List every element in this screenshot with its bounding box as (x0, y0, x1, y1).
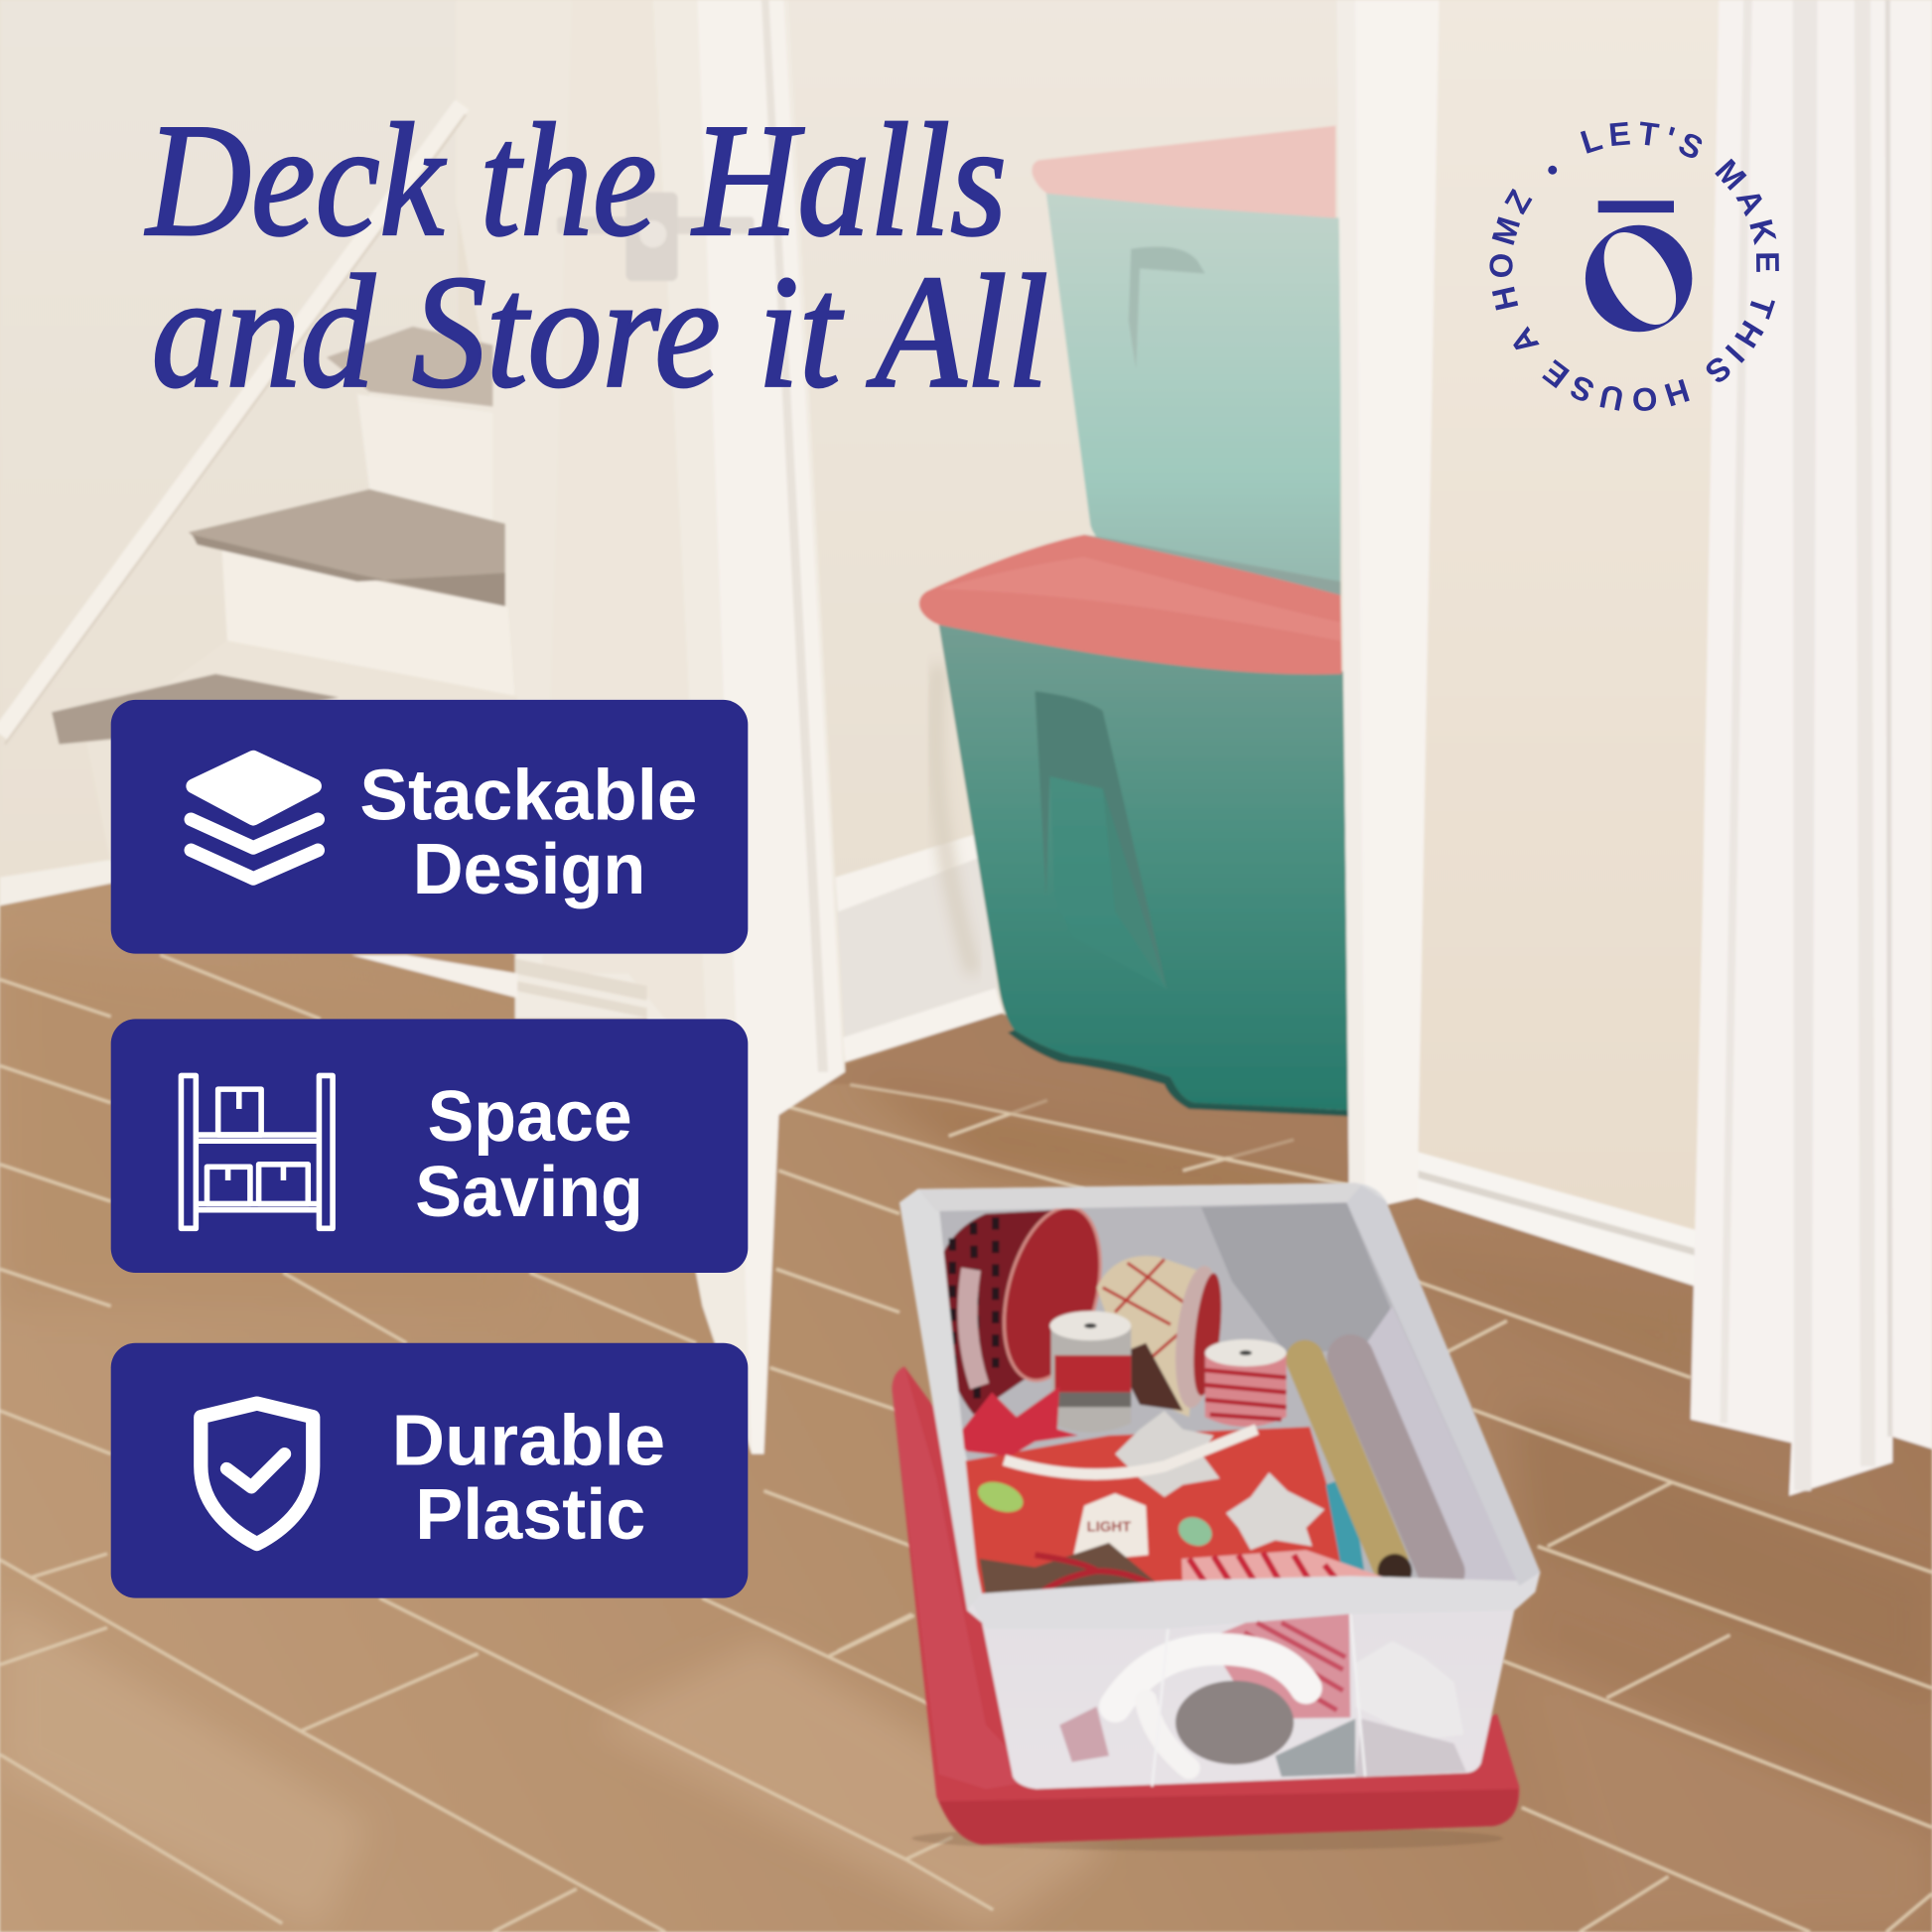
interior back wall (936, 1200, 1519, 1594)
title: and Store it All (152, 242, 1048, 421)
door and frame (351, 0, 845, 1453)
label: durable plastic (392, 1402, 665, 1555)
door handle (557, 193, 755, 281)
panel: stackable design (111, 700, 748, 954)
gift tag (1072, 1493, 1149, 1563)
cream plaid ribbon (1097, 1256, 1201, 1417)
icon: shelf with boxes (181, 1075, 333, 1228)
title (145, 91, 1048, 421)
wrapping paper (956, 1427, 1350, 1594)
silver bows (1115, 1411, 1220, 1497)
scalloped trim (1004, 1430, 1257, 1474)
twine spool (1205, 1353, 1287, 1427)
right door frame (1337, 0, 1445, 1213)
label: durable plastic: Durable (392, 1402, 665, 1481)
icon: stacked layers (191, 758, 318, 879)
back wall (776, 0, 1355, 1115)
front rim (967, 1573, 1540, 1629)
red bow (955, 1386, 1078, 1456)
left wall (0, 0, 459, 881)
gold roll (1305, 1359, 1390, 1563)
clear storage tub with red lid and wrapping supplies (893, 1182, 1540, 1851)
handrail (0, 104, 462, 735)
right door folds (1691, 0, 1932, 1496)
skirting left (0, 859, 117, 905)
label: stackable design (359, 756, 697, 909)
stair wall (369, 0, 579, 955)
panel: space saving (111, 1019, 748, 1273)
tile floor (0, 850, 1932, 1932)
right baseboard (1417, 1152, 1699, 1288)
front contents seen through tub (1207, 1614, 1350, 1719)
left rim (899, 1189, 980, 1610)
label: space saving: Saving (415, 1153, 643, 1232)
gray roll (1350, 1358, 1442, 1573)
right wall (1418, 0, 1723, 1238)
red lid (893, 1366, 1519, 1845)
baseboard behind bins (835, 833, 1001, 1062)
silver spool (1051, 1325, 1131, 1433)
burlap (980, 1543, 1169, 1601)
clear storage tub with red lid and wrapping supplies: LIGHT (1087, 1520, 1131, 1536)
plaid ribbon (934, 1210, 1084, 1415)
label: space saving: Space (428, 1077, 632, 1157)
striped paper (1181, 1550, 1401, 1596)
label: stackable design: Stackable (359, 756, 697, 835)
label: durable plastic: Plastic (415, 1475, 645, 1555)
tub body (899, 1182, 1540, 1789)
icon: shield with check (201, 1404, 313, 1544)
logo mark (1586, 201, 1692, 337)
logo badge (1489, 121, 1779, 411)
panel: durable plastic (111, 1343, 748, 1598)
label: stackable design: Design (413, 830, 645, 909)
stair risers (52, 327, 517, 863)
title: Deck the Halls (145, 91, 1007, 270)
logo circular tagline: LET'S MAKE THIS HOUSE A HOMZ (1489, 121, 1779, 411)
lower storage bin (919, 535, 1349, 1116)
upper storage bin (1032, 126, 1340, 597)
label: space saving (415, 1077, 643, 1232)
